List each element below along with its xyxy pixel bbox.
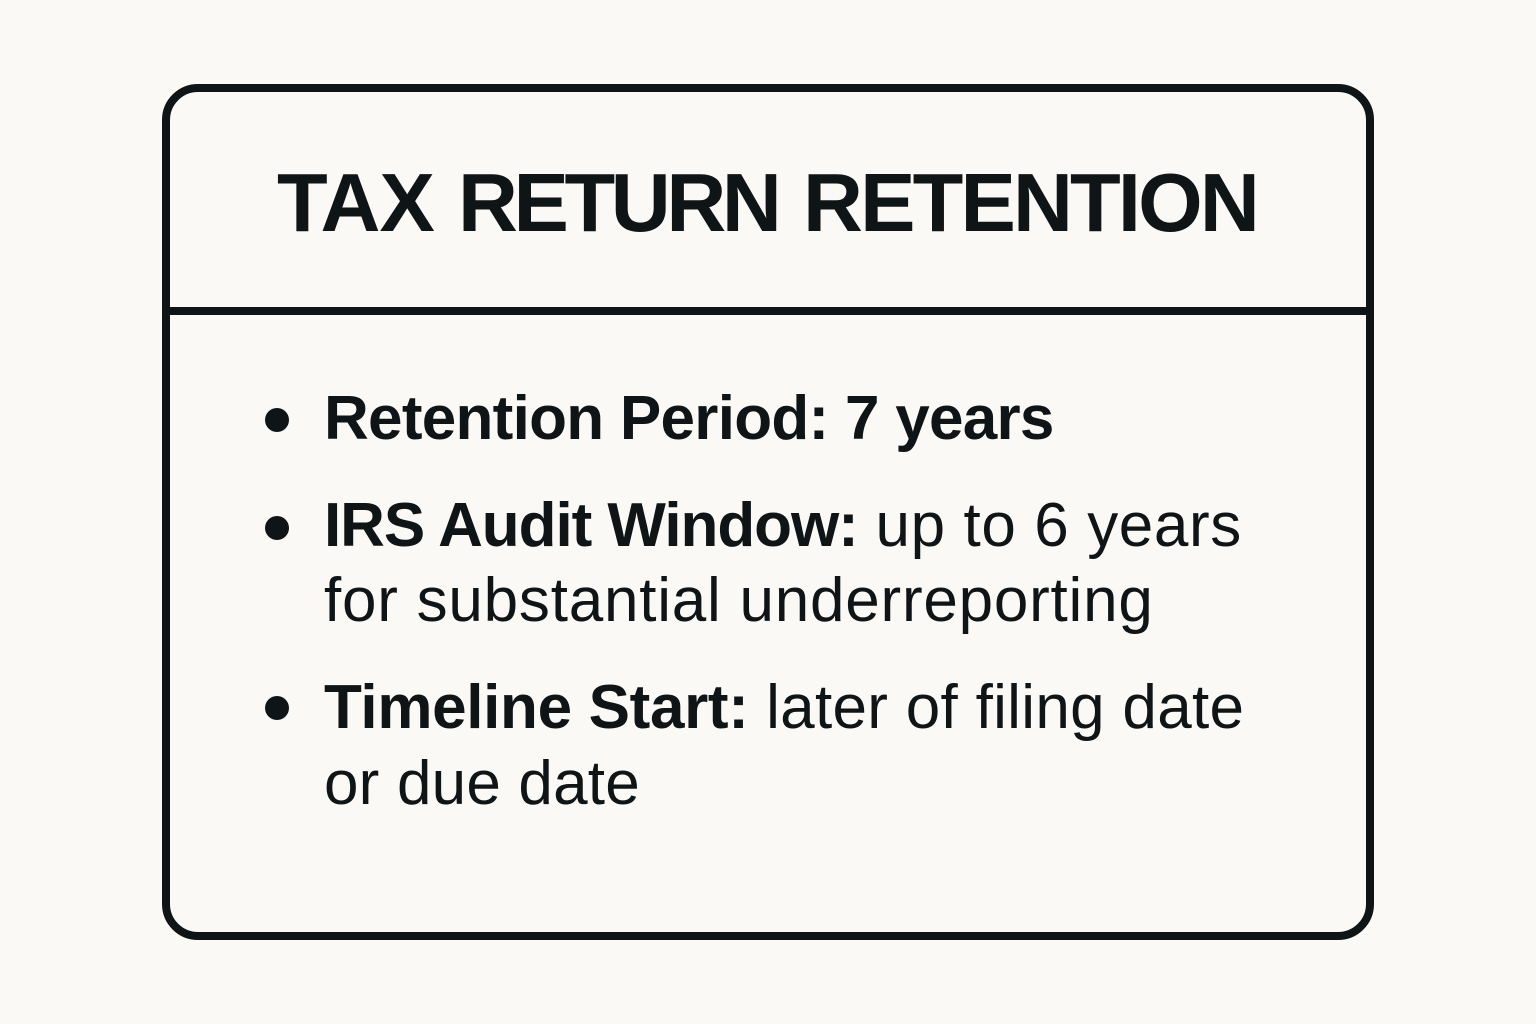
panel: tax return retention card	[162, 84, 1374, 940]
bullet: timeline start: or due date	[324, 749, 640, 818]
bullet: timeline start	[265, 673, 1244, 818]
title	[277, 156, 1257, 249]
divider under heading	[166, 307, 1370, 314]
bullet: IRS audit window	[265, 491, 1242, 635]
bullet: IRS audit window: IRS Audit Window: up to 6 years	[324, 491, 1242, 560]
bullet: timeline start: Timeline Start: later of filing date	[324, 673, 1244, 742]
bullet: IRS audit window: for substantial underreporting	[324, 566, 1154, 635]
title: RETURN	[458, 156, 777, 249]
title: RETENTION	[803, 156, 1257, 249]
bullet: retention period: Retention Period: 7 years	[324, 384, 1054, 453]
title: TAX	[277, 156, 434, 249]
